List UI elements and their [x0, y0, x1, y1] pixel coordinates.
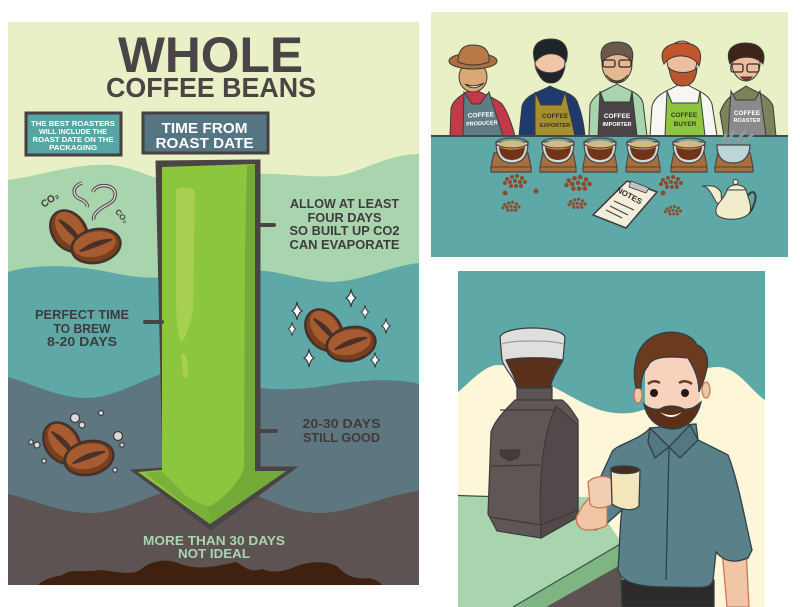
person: coffee exporter: COFFEE	[542, 113, 569, 120]
clipboard: notes	[593, 181, 657, 228]
callout: best roasters: PACKAGING	[49, 143, 97, 152]
cream hill	[458, 365, 765, 607]
title: COFFEE BEANS	[106, 72, 316, 103]
icon: sparkling beans	[288, 289, 390, 368]
mug	[611, 466, 640, 510]
text: perfect time to brew: 8-20 DAYS	[47, 334, 117, 349]
text: 20-30 days still good: 20-30 DAYS	[302, 416, 381, 431]
text: 20-30 days still good: STILL GOOD	[303, 430, 380, 445]
heading box: time from roast date: ROAST DATE	[156, 135, 254, 152]
arm: right	[722, 548, 749, 607]
person: coffee exporter	[519, 39, 585, 136]
band: slate, still good	[8, 373, 419, 520]
table	[431, 135, 788, 257]
heading box: time from roast date	[143, 113, 268, 153]
text: allow at least four days	[290, 196, 400, 252]
text: perfect time to brew	[35, 307, 129, 349]
hair	[634, 332, 708, 392]
callout: best roasters	[26, 113, 121, 155]
trousers	[621, 580, 714, 607]
band: teal, perfect time	[8, 263, 419, 400]
person: coffee producer: COFFEE	[468, 111, 495, 120]
text: more than 30 days not ideal	[143, 533, 285, 561]
cupping boards and bowls	[491, 131, 753, 172]
person: coffee buyer	[650, 41, 717, 136]
title: WHOLE	[118, 27, 303, 83]
shirt	[588, 424, 752, 587]
text: allow at least four days: FOUR DAYS	[308, 210, 382, 225]
neck and head	[645, 355, 700, 429]
text: allow at least four days: CAN EVAPORATE	[290, 237, 400, 252]
panel: barista with grinder	[458, 271, 765, 607]
person: coffee buyer: BUYER	[674, 121, 697, 128]
person: coffee importer: COFFEE	[604, 113, 631, 120]
text: allow at least four days: ALLOW AT LEAST	[290, 196, 399, 211]
counter	[458, 496, 622, 607]
callout: best roasters: THE BEST ROASTERS	[31, 119, 115, 128]
panel: whole coffee beans infographic	[8, 22, 419, 585]
icon: beans with CO2: CO₂	[113, 207, 130, 226]
person: coffee producer	[449, 45, 515, 136]
icon: beans with CO2: CO₂	[39, 190, 61, 210]
text: perfect time to brew: TO BREW	[54, 321, 111, 336]
heading box: time from roast date: TIME FROM	[162, 120, 248, 137]
coffee bean piles	[501, 174, 683, 216]
coffee grinder	[488, 328, 578, 538]
person: coffee buyer: COFFEE	[671, 112, 698, 119]
text: more than 30 days not ideal: NOT IDEAL	[178, 546, 250, 561]
forearm and hand	[576, 497, 607, 530]
barista	[576, 332, 752, 607]
person: coffee producer: PRODUCER	[466, 120, 498, 128]
coffee grounds	[38, 561, 382, 585]
person: coffee importer	[589, 42, 647, 136]
clipboard: notes: NOTES	[615, 185, 644, 207]
callout: best roasters: WILL INCLUDE THE	[39, 127, 107, 136]
band: brown, not ideal	[8, 491, 419, 585]
person: coffee roaster	[720, 43, 776, 136]
person: coffee roaster: ROASTER	[734, 118, 760, 124]
icon: beans with CO2	[39, 183, 130, 269]
person: coffee exporter: EXPORTER	[540, 123, 570, 129]
eyes	[650, 389, 658, 397]
icon: beans with bubbles	[29, 410, 124, 481]
text: 20-30 days still good	[302, 416, 381, 445]
callout: best roasters: ROAST DATE ON THE	[32, 135, 114, 144]
title	[106, 27, 316, 103]
text: allow at least four days: SO BUILT UP CO2	[290, 223, 400, 238]
teapot	[702, 180, 756, 219]
person: coffee roaster: COFFEE	[734, 110, 761, 117]
arrow	[131, 160, 297, 530]
band: light green, first days	[8, 154, 419, 300]
person: coffee importer: IMPORTER	[602, 122, 632, 128]
panel: coffee tasting team	[431, 12, 788, 257]
text: perfect time to brew: PERFECT TIME	[35, 307, 129, 322]
tick marks	[145, 225, 276, 431]
beard	[644, 402, 701, 429]
text: more than 30 days not ideal: MORE THAN 30 DAYS	[143, 533, 285, 548]
